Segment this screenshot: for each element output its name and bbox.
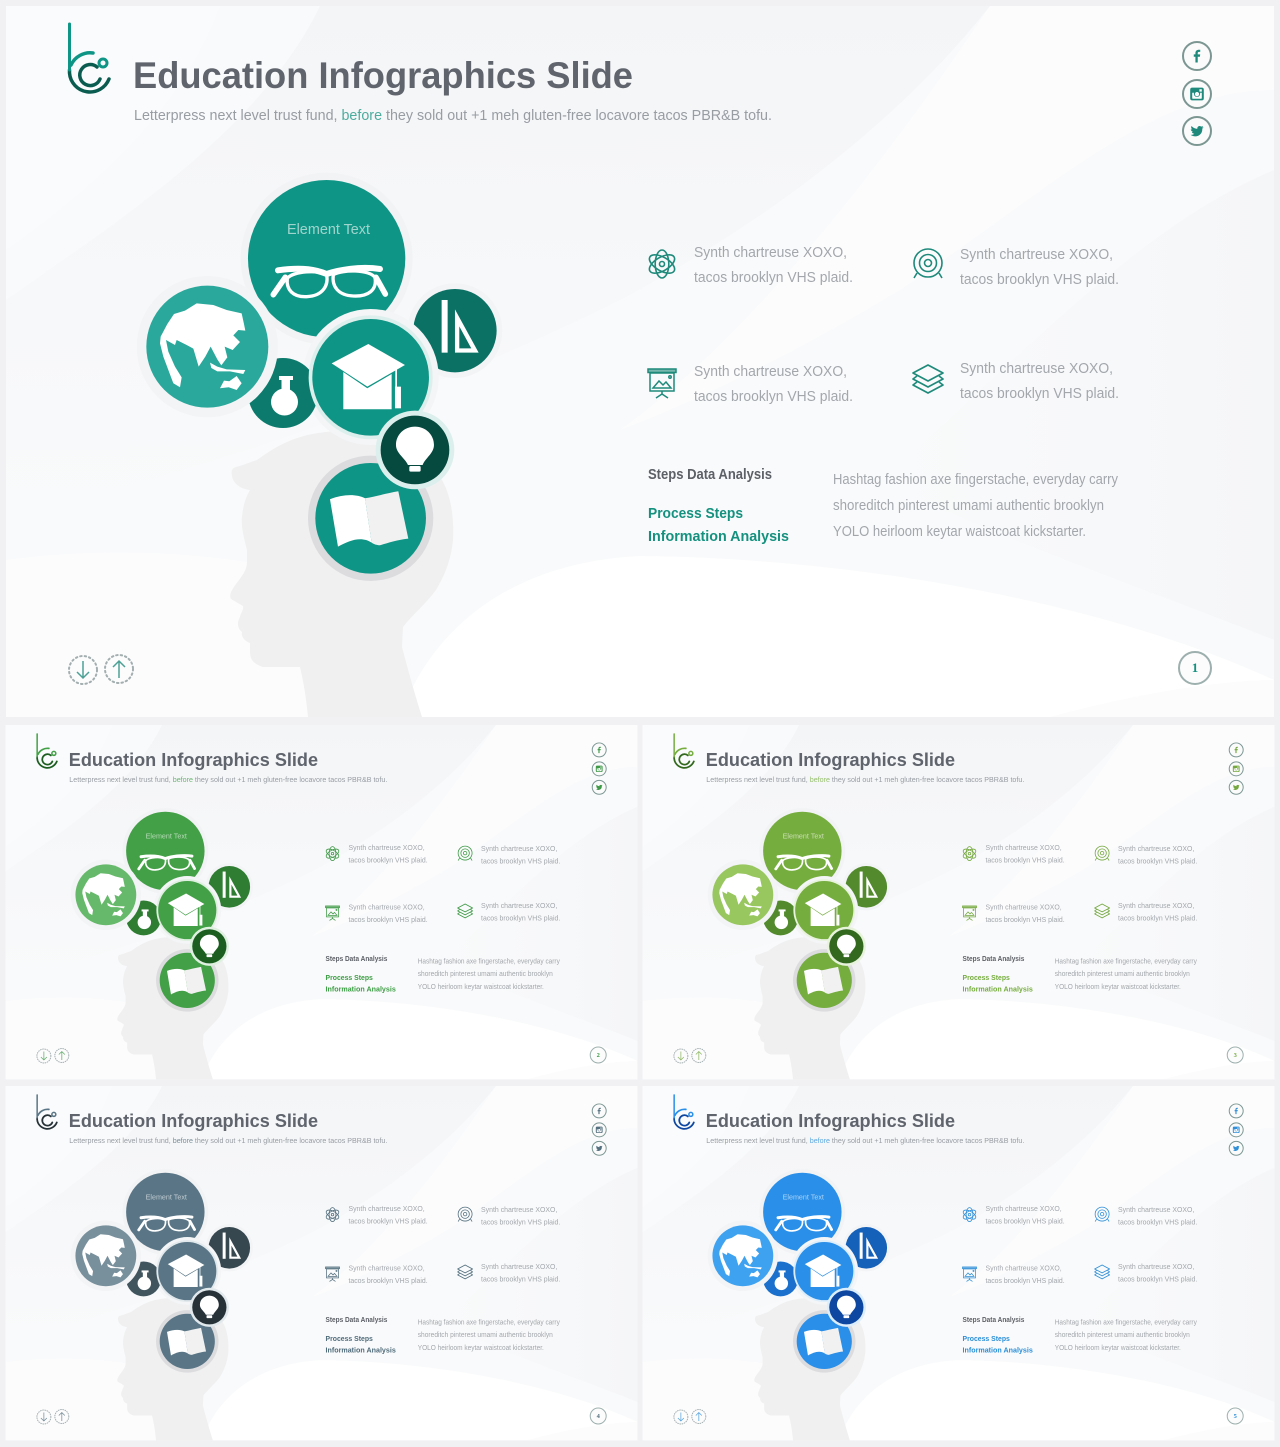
paragraph: Hashtag fashion axe fingerstache, everyday carry [1055,1317,1197,1326]
paragraph: shoreditch pinterest umami authentic brooklyn [418,1330,553,1339]
bubble: light bulb [190,927,229,966]
text: item 2: tacos brooklyn VHS plaid. [1118,1218,1197,1227]
icon: ruler [223,1233,241,1259]
page number: 2 [597,1052,600,1059]
bubble: graduation cap [793,879,855,941]
icon: atom [325,847,340,861]
paragraph: YOLO heirloom keytar waistcoat kickstarter. [1055,1343,1181,1352]
bubble: book [156,1310,219,1373]
panel: teal slide (main) [6,6,1274,717]
icon: presentation board [326,906,339,920]
icon: twitter [1183,117,1211,145]
text: item 4: tacos brooklyn VHS plaid. [481,1274,560,1283]
bubble: light bulb [376,411,454,489]
slide background [6,6,1274,717]
icon: layers [458,904,473,918]
bubble: graduation cap [156,1240,218,1302]
icon: atom [646,250,678,278]
page number: 3 [1234,1052,1238,1059]
head silhouette [117,1298,228,1440]
bubble: flask [126,1261,161,1296]
bubble: globe [708,860,778,930]
paragraph: Hashtag fashion axe fingerstache, everyday carry [1055,956,1197,965]
text: item 1: Synth chartreuse XOXO, [694,244,847,261]
bubble: globe [708,1221,778,1291]
heading: steps: Steps Data Analysis [326,954,387,963]
heading: process: Process Steps [963,1334,1010,1343]
title: Education Infographics Slide [69,749,318,770]
bubble: book [156,949,219,1012]
icon: twitter [1229,780,1243,794]
text: item 1: Synth chartreuse XOXO, [348,1204,425,1213]
bubble: cap spacing [303,309,439,445]
slide background [642,725,1275,1079]
text: item 2: tacos brooklyn VHS plaid. [481,857,560,866]
bubble label: Element Text [783,832,825,841]
text: item 3: Synth chartreuse XOXO, [985,902,1062,911]
title: Education Infographics Slide [133,55,633,96]
bubble: globe [137,276,278,417]
text: item 3: Synth chartreuse XOXO, [348,902,425,911]
bubble: light bulb [827,927,866,966]
heading: steps: Steps Data Analysis [963,1315,1024,1324]
text: item 4: Synth chartreuse XOXO, [1118,1262,1194,1271]
bubble: globe [71,860,141,930]
arrow: down [674,1049,688,1063]
bubble: ruler circle [206,1224,253,1271]
icon: target [458,1207,472,1222]
icon: presentation board [963,906,976,920]
page number: 1 [1192,660,1198,675]
icon: layers [458,1265,473,1279]
arrow: up [692,1410,706,1423]
paragraph: shoreditch pinterest umami authentic brooklyn [833,498,1104,514]
text: item 2: tacos brooklyn VHS plaid. [960,271,1119,288]
subtitle: Letterpress next level trust fund, before they sold out +1 meh gluten-free locavore tacos PBR&B tofu. [706,1136,1024,1145]
text: item 1: tacos brooklyn VHS plaid. [694,269,853,286]
icon: target [458,846,472,861]
page number [590,1047,606,1063]
arrow: up [55,1410,69,1423]
icon: presentation board [963,1267,976,1281]
icon: atom [325,1208,340,1222]
icon: instagram [1229,762,1243,776]
icon: twitter [592,780,606,794]
paragraph: shoreditch pinterest umami authentic brooklyn [1055,1330,1190,1339]
text: item 2: Synth chartreuse XOXO, [481,844,557,853]
text: item 3: tacos brooklyn VHS plaid. [348,915,428,924]
heading: process: Process Steps [963,973,1010,982]
heading: process: Process Steps [326,973,373,982]
bubble: ruler circle [843,1224,890,1271]
icon: instagram [1229,1123,1243,1137]
bubble: book [793,949,856,1012]
icon: presentation board [326,1267,339,1281]
head silhouette [754,937,865,1079]
paragraph: shoreditch pinterest umami authentic brooklyn [1055,969,1190,978]
icon: facebook [1229,1104,1243,1118]
text: item 3: tacos brooklyn VHS plaid. [985,915,1065,924]
bubble: light bulb [190,1288,229,1327]
heading: steps: Steps Data Analysis [963,954,1024,963]
heading: process: Information Analysis [963,985,1033,994]
subtitle: Letterpress next level trust fund, before they sold out +1 meh gluten-free locavore tacos PBR&B tofu. [69,1136,387,1145]
icon: facebook [1183,42,1211,70]
logo [674,734,694,768]
icon: target [1095,1207,1109,1222]
paragraph: YOLO heirloom keytar waistcoat kickstarter. [1055,982,1181,991]
icon: ruler [223,872,241,898]
head silhouette [117,937,228,1079]
paragraph: Hashtag fashion axe fingerstache, everyday carry [418,1317,560,1326]
logo [674,1095,694,1129]
icon: instagram [592,762,606,776]
arrow: down [69,656,97,684]
bubble: book [793,1310,856,1373]
heading: steps: Steps Data Analysis [648,466,772,483]
paragraph: Hashtag fashion axe fingerstache, everyday carry [833,472,1119,488]
heading: process: Information Analysis [648,528,789,545]
icon: ruler [442,300,479,353]
arrow: up [55,1049,69,1062]
text: item 2: tacos brooklyn VHS plaid. [481,1218,560,1227]
text: item 3: Synth chartreuse XOXO, [348,1263,425,1272]
text: item 1: tacos brooklyn VHS plaid. [348,1217,428,1226]
text: item 4: Synth chartreuse XOXO, [1118,901,1194,910]
logo [37,734,57,768]
page number: 5 [1234,1413,1237,1420]
text: item 1: Synth chartreuse XOXO, [985,1204,1062,1213]
icon: twitter [1229,1141,1243,1155]
subtitle: Letterpress next level trust fund, before they sold out +1 meh gluten-free locavore tacos PBR&B tofu. [69,775,387,784]
bubble: glasses [759,808,845,894]
bubble: flask [763,1261,798,1296]
text: item 4: Synth chartreuse XOXO, [481,901,557,910]
icon: facebook [592,743,606,757]
text: item 4: tacos brooklyn VHS plaid. [960,385,1119,402]
text: item 1: tacos brooklyn VHS plaid. [348,856,428,865]
text: item 1: Synth chartreuse XOXO, [348,843,425,852]
bubble label: Element Text [146,1193,188,1202]
head silhouette [230,431,453,717]
bubble: cap spacing [790,876,858,944]
subtitle: Letterpress next level trust fund, before they sold out +1 meh gluten-free locavore tacos PBR&B tofu. [706,775,1024,784]
bubble: cap spacing [153,1237,221,1305]
bubble: globe [71,1221,141,1291]
heading: process: Information Analysis [963,1346,1033,1355]
icon: facebook [592,1104,606,1118]
icon: layers [913,365,943,393]
paragraph: YOLO heirloom keytar waistcoat kickstarter. [418,982,544,991]
icon: target [1095,846,1109,861]
page number [1179,652,1211,684]
arrow: up [692,1049,706,1062]
text: item 4: Synth chartreuse XOXO, [960,360,1113,377]
text: item 1: Synth chartreuse XOXO, [985,843,1062,852]
text: item 2: Synth chartreuse XOXO, [481,1205,557,1214]
paragraph: YOLO heirloom keytar waistcoat kickstarter. [833,524,1086,540]
arrow: down [37,1049,51,1063]
slide background [642,1086,1275,1440]
bubble label: Element Text [287,221,371,238]
text: item 4: tacos brooklyn VHS plaid. [1118,913,1197,922]
page number [590,1408,606,1424]
bubble: ruler circle [408,283,502,378]
icon: atom [962,847,977,861]
text: item 4: tacos brooklyn VHS plaid. [1118,1274,1197,1283]
icon: ruler [860,1233,878,1259]
bubble: ruler circle [206,863,253,910]
bubble label: Element Text [783,1193,825,1202]
slide background [5,725,638,1079]
arrow: down [674,1410,688,1424]
panel: slate slide [5,1086,638,1440]
page number [1227,1408,1243,1424]
text: item 3: Synth chartreuse XOXO, [985,1263,1062,1272]
bubble: graduation cap [793,1240,855,1302]
panel: green slide [5,725,638,1079]
logo [70,24,109,92]
title: Education Infographics Slide [706,1110,955,1131]
bubble: glasses [122,1169,208,1255]
icon: layers [1095,904,1110,918]
icon: instagram [592,1123,606,1137]
bubble: book [308,456,433,581]
bubble: glasses [241,173,413,345]
heading: process: Information Analysis [326,1346,396,1355]
icon: twitter [592,1141,606,1155]
bubble: cap spacing [790,1237,858,1305]
heading: steps: Steps Data Analysis [326,1315,387,1324]
text: item 2: Synth chartreuse XOXO, [1118,844,1194,853]
text: item 2: tacos brooklyn VHS plaid. [1118,857,1197,866]
slide background [5,1086,638,1440]
text: item 1: tacos brooklyn VHS plaid. [985,856,1065,865]
icon: instagram [1183,80,1211,108]
bubble: flask [763,900,798,935]
text: item 2: Synth chartreuse XOXO, [960,246,1113,263]
text: item 3: tacos brooklyn VHS plaid. [694,388,853,405]
paragraph: YOLO heirloom keytar waistcoat kickstarter. [418,1343,544,1352]
text: item 3: Synth chartreuse XOXO, [694,363,847,380]
arrow: down [37,1410,51,1424]
subtitle: Letterpress next level trust fund, before they sold out +1 meh gluten-free locavore tacos PBR&B tofu. [134,108,772,124]
bubble: light bulb [827,1288,866,1327]
text: item 1: tacos brooklyn VHS plaid. [985,1217,1065,1226]
bubble: cap spacing [153,876,221,944]
bubble: ruler circle [843,863,890,910]
bubble label: Element Text [146,832,188,841]
paragraph: Hashtag fashion axe fingerstache, everyday carry [418,956,560,965]
icon: facebook [1229,743,1243,757]
bubble: glasses [759,1169,845,1255]
logo [37,1095,57,1129]
panel: light green slide [642,725,1275,1079]
text: item 3: tacos brooklyn VHS plaid. [348,1276,428,1285]
heading: process: Process Steps [326,1334,373,1343]
head silhouette [754,1298,865,1440]
panel: blue slide [642,1086,1275,1440]
title: Education Infographics Slide [706,749,955,770]
icon: ruler [860,872,878,898]
text: item 4: Synth chartreuse XOXO, [481,1262,557,1271]
text: item 4: tacos brooklyn VHS plaid. [481,913,560,922]
icon: layers [1095,1265,1110,1279]
title: Education Infographics Slide [69,1110,318,1131]
bubble: graduation cap [156,879,218,941]
icon: atom [962,1208,977,1222]
page number [1227,1047,1243,1063]
heading: process: Information Analysis [326,985,396,994]
heading: process: Process Steps [648,505,743,522]
paragraph: shoreditch pinterest umami authentic brooklyn [418,969,553,978]
bubble: flask [248,358,318,428]
page number: 4 [597,1413,601,1420]
text: item 3: tacos brooklyn VHS plaid. [985,1276,1065,1285]
bubble: graduation cap [309,315,433,439]
bubble: glasses [122,808,208,894]
text: item 2: Synth chartreuse XOXO, [1118,1205,1194,1214]
bubble: flask [126,900,161,935]
icon: target [914,249,942,278]
icon: presentation board [648,369,676,398]
arrow: up [105,655,133,683]
